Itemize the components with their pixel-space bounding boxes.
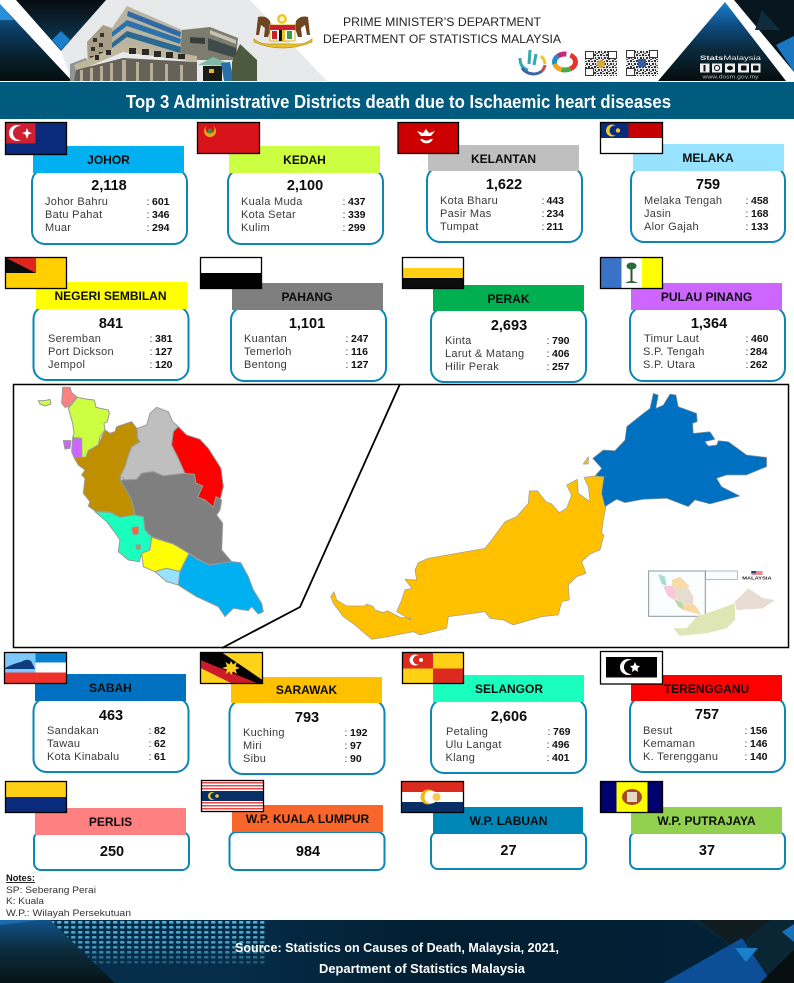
districts: Kedah: 339 — [348, 209, 366, 221]
map: Sabah and Sarawak — [331, 393, 767, 639]
flag: Johor — [6, 122, 66, 154]
header: Pulau Pinang: PULAU PINANG — [661, 290, 752, 304]
card: Selangor — [402, 652, 586, 773]
districts: Perak: : — [546, 361, 549, 373]
footer left triangles — [0, 920, 115, 983]
total: Kedah: 2,100 — [287, 178, 323, 194]
flag: Pahang — [200, 258, 262, 288]
inset map of Malaysia — [649, 571, 775, 636]
districts: Selangor: : — [546, 739, 549, 751]
districts: Perak — [445, 335, 570, 373]
total: W.P. Labuan: 27 — [500, 843, 517, 859]
districts: Sarawak: Miri — [243, 740, 262, 752]
districts: Johor: Batu Pahat — [45, 209, 102, 221]
districts: Melaka: Alor Gajah — [644, 221, 699, 233]
total: W.P. Putrajaya: 37 — [699, 843, 715, 859]
districts: Sabah: : — [148, 725, 151, 737]
districts: Selangor: : — [548, 726, 550, 738]
districts: Melaka: : — [746, 208, 748, 220]
districts: Terengganu: Kemaman — [643, 738, 695, 750]
districts: Sabah: : — [148, 751, 151, 763]
districts: Sabah: Sandakan — [47, 725, 99, 737]
districts: Terengganu — [643, 725, 768, 763]
header: Sarawak: SARAWAK — [276, 683, 337, 697]
header right StatsMalaysia panel: www.dosm.gov.my — [702, 74, 759, 80]
title bar — [0, 82, 794, 119]
total: W.P. Kuala Lumpur: 984 — [296, 844, 320, 860]
header: Negeri Sembilan: NEGERI SEMBILAN — [54, 289, 167, 303]
total: Terengganu: 757 — [695, 707, 719, 723]
districts: Perak: : — [546, 335, 549, 347]
districts: Selangor: 496 — [552, 739, 570, 751]
districts: Johor: : — [146, 196, 149, 208]
flag: Kedah — [198, 122, 260, 154]
districts: Melaka: 168 — [751, 208, 769, 220]
header: W.P. Putrajaya: W.P. PUTRAJAYA — [657, 814, 756, 828]
districts: Kedah: : — [342, 209, 345, 221]
map panel — [14, 384, 788, 648]
header left dark pattern — [0, 0, 327, 81]
districts: Sabah: 62 — [154, 738, 166, 750]
card: W.P. Putrajaya — [600, 782, 785, 869]
header banner — [0, 0, 794, 81]
districts: Johor — [45, 196, 170, 234]
districts: Pulau Pinang: : — [746, 333, 748, 345]
card: Perak — [402, 258, 586, 382]
icon: QR code website — [585, 51, 617, 76]
districts: Negeri Sembilan: 127 — [155, 346, 173, 358]
total: Negeri Sembilan: 841 — [99, 316, 123, 332]
header right StatsMalaysia panel: Stats Malaysia — [700, 55, 761, 62]
districts: Sarawak: : — [344, 740, 347, 752]
districts: Kelantan: : — [542, 208, 544, 220]
header: Melaka: MELAKA — [682, 151, 734, 165]
total: Pulau Pinang: 1,364 — [691, 316, 727, 332]
districts: Kelantan: Kota Bharu — [440, 195, 498, 207]
districts: Kedah: : — [342, 222, 345, 234]
header: Terengganu: TERENGGANU — [664, 682, 749, 696]
districts: Terengganu: : — [744, 751, 747, 763]
card: Melaka — [600, 122, 785, 242]
districts: Perak: Hilir Perak — [445, 361, 499, 373]
districts: Selangor: Petaling — [446, 726, 488, 738]
districts: Kedah: 437 — [348, 196, 366, 208]
districts: Melaka: : — [746, 221, 748, 233]
districts: Pahang: : — [346, 346, 348, 358]
districts: Selangor: 401 — [552, 752, 570, 764]
districts: Sarawak — [243, 727, 368, 765]
districts: Negeri Sembilan: 381 — [155, 333, 173, 345]
connector line — [222, 384, 400, 648]
icon: Malaysia coat of arms — [254, 14, 312, 48]
districts: Selangor — [446, 726, 571, 764]
districts: Terengganu: 140 — [750, 751, 768, 763]
districts: Negeri Sembilan: : — [150, 346, 152, 358]
districts: Sarawak: Sibu — [243, 753, 266, 765]
card: Perlis — [6, 782, 189, 870]
districts: Johor: 601 — [152, 196, 170, 208]
total: Kelantan: 1,622 — [486, 177, 522, 193]
districts: Pahang: 116 — [351, 346, 368, 358]
flag: Sabah — [4, 652, 66, 684]
districts: Perak: : — [546, 348, 549, 360]
header: Johor — [33, 146, 184, 173]
inset map of Malaysia: MALAYSIA — [742, 576, 773, 581]
header organisation text — [323, 15, 562, 46]
districts: Sarawak: : — [344, 753, 347, 765]
total: Perlis: 250 — [100, 844, 124, 860]
districts: Terengganu: K. Terengganu — [643, 751, 718, 763]
districts: Johor: Johor Bahru — [45, 196, 108, 208]
districts: Johor: : — [146, 222, 149, 234]
header: Sabah: SABAH — [89, 681, 132, 695]
districts: Pahang: : — [346, 359, 348, 371]
flag: Pulau Pinang — [600, 258, 662, 288]
districts: Kelantan — [440, 195, 564, 233]
districts: Melaka: Melaka Tengah — [644, 195, 722, 207]
header: Perlis: PERLIS — [89, 815, 132, 829]
districts: Pulau Pinang: S.P. Utara — [643, 359, 696, 371]
flag: Perlis — [6, 782, 66, 812]
districts: Kelantan: Pasir Mas — [440, 208, 492, 220]
districts: Kedah — [241, 196, 366, 234]
building photo — [70, 6, 257, 81]
header: Terengganu — [631, 675, 782, 701]
districts: Kedah: : — [342, 196, 345, 208]
card: Terengganu — [600, 652, 785, 772]
districts: Selangor: 769 — [553, 726, 571, 738]
header: W.P. Labuan: W.P. LABUAN — [470, 814, 547, 828]
districts: Kedah: Kuala Muda — [241, 196, 303, 208]
districts: Johor: 346 — [152, 209, 170, 221]
districts: Pahang — [244, 333, 369, 371]
districts: Terengganu: : — [744, 738, 747, 750]
total: Perak: 2,693 — [491, 318, 527, 334]
districts: Kelantan: : — [542, 195, 544, 207]
flag: W.P. Putrajaya — [600, 782, 662, 812]
districts: Sabah: 82 — [154, 725, 166, 737]
districts: Kelantan: : — [542, 221, 544, 233]
districts: Selangor: Ulu Langat — [446, 739, 502, 751]
total: Johor: 2,118 — [91, 178, 127, 194]
districts: Melaka: Jasin — [644, 208, 671, 220]
header organisation text: DEPARTMENT OF STATISTICS MALAYSIA — [323, 32, 562, 46]
flag: W.P. Kuala Lumpur — [202, 780, 264, 812]
card: Sarawak — [200, 652, 384, 774]
districts: Sabah: Tawau — [47, 738, 80, 750]
card: Sabah — [4, 652, 188, 772]
districts: Pulau Pinang: 460 — [751, 333, 769, 345]
districts: Sabah — [47, 725, 166, 763]
flag: Negeri Sembilan — [6, 258, 66, 288]
districts: Kelantan: 443 — [546, 195, 564, 207]
districts: Sarawak: : — [344, 727, 347, 739]
total: Selangor: 2,606 — [491, 709, 527, 725]
districts: Pulau Pinang: 262 — [750, 359, 768, 371]
districts: Pulau Pinang: Timur Laut — [644, 333, 699, 345]
map: Peninsular Malaysia — [38, 387, 263, 617]
header: Selangor — [433, 675, 584, 702]
districts: Negeri Sembilan — [48, 333, 173, 371]
card: Kedah — [198, 122, 383, 244]
footer band — [0, 920, 794, 983]
header: W.P. Putrajaya — [631, 807, 782, 834]
header: Sarawak — [231, 677, 382, 703]
districts: Pahang: Kuantan — [244, 333, 287, 345]
header: Sabah — [35, 674, 186, 701]
districts: Negeri Sembilan: Jempol — [48, 359, 85, 371]
districts: Kedah: 299 — [348, 222, 366, 234]
districts: Pahang: Bentong — [244, 359, 287, 371]
districts: Terengganu: Besut — [643, 725, 673, 737]
districts: Pahang: 127 — [351, 359, 369, 371]
districts: Pahang: 247 — [351, 333, 369, 345]
flag: Melaka — [600, 122, 662, 154]
districts: Pulau Pinang: : — [746, 359, 748, 371]
icon: QR code facebook — [626, 50, 658, 76]
header: Perak — [433, 285, 584, 311]
districts: Kelantan: 234 — [546, 208, 564, 220]
districts: Melaka: 133 — [751, 221, 769, 233]
districts: Negeri Sembilan: : — [150, 359, 152, 371]
districts: Sabah: : — [148, 738, 151, 750]
districts: Melaka — [644, 195, 769, 233]
header: W.P. Kuala Lumpur: W.P. KUALA LUMPUR — [246, 812, 369, 826]
total: Sabah: 463 — [99, 708, 123, 724]
card: Johor — [6, 122, 187, 244]
header: Pahang — [232, 283, 383, 310]
flag: Sarawak — [200, 652, 262, 684]
districts: Negeri Sembilan: : — [150, 333, 152, 345]
icon: statistics logo — [520, 50, 545, 74]
header: Pahang: PAHANG — [281, 290, 333, 304]
footer dot pattern — [45, 920, 265, 965]
districts: Negeri Sembilan: Port Dickson — [48, 346, 114, 358]
districts: Pulau Pinang: S.P. Tengah — [643, 346, 705, 358]
districts: Negeri Sembilan: 120 — [155, 359, 173, 371]
flag: W.P. Labuan — [402, 782, 464, 812]
header: Perak: PERAK — [487, 292, 530, 306]
header: Kelantan — [428, 145, 579, 171]
header: Selangor: SELANGOR — [475, 682, 543, 696]
source text — [235, 940, 559, 976]
total: Melaka: 759 — [696, 177, 720, 193]
districts: Perak: 406 — [552, 348, 570, 360]
districts: Sarawak: Kuching — [243, 727, 285, 739]
districts: Johor: Muar — [45, 222, 71, 234]
header: W.P. Labuan — [433, 807, 583, 834]
districts: Perak: 790 — [552, 335, 570, 347]
notes: SP: Seberang Perai — [6, 885, 96, 896]
header: Negeri Sembilan — [36, 282, 187, 309]
districts: Selangor: Klang — [446, 752, 475, 764]
card: W.P. Kuala Lumpur — [202, 780, 384, 870]
header: Pulau Pinang — [631, 283, 782, 310]
districts: Terengganu: 156 — [750, 725, 768, 737]
flag: Kelantan — [398, 122, 458, 154]
districts: Terengganu: : — [744, 725, 747, 737]
header: Perlis — [35, 808, 186, 835]
card: Pulau Pinang — [600, 258, 785, 381]
source text: Department of Statistics Malaysia — [319, 961, 526, 976]
header: Kedah: KEDAH — [283, 153, 326, 167]
header: Johor: JOHOR — [87, 153, 130, 167]
title bar: Top 3 Administrative Districts death due to Ischaemic heart diseases — [126, 92, 671, 112]
card: W.P. Labuan — [402, 782, 586, 869]
districts: Sarawak: 97 — [350, 740, 362, 752]
districts: Perak: Kinta — [445, 335, 472, 347]
districts: Pulau Pinang: : — [746, 346, 748, 358]
districts: Johor: 294 — [152, 222, 170, 234]
districts: Melaka: 458 — [751, 195, 769, 207]
districts: Sarawak: 90 — [350, 753, 362, 765]
card: Pahang — [200, 258, 386, 381]
card: Negeri Sembilan — [6, 258, 188, 380]
header: Kelantan: KELANTAN — [471, 152, 536, 166]
districts: Sabah: Kota Kinabalu — [47, 751, 119, 763]
total: Sarawak: 793 — [295, 710, 319, 726]
districts: Sarawak: 192 — [350, 727, 368, 739]
districts: Pahang: Temerloh — [244, 346, 292, 358]
flag: Terengganu — [600, 652, 662, 684]
notes: K: Kuala — [6, 896, 45, 907]
districts: Kedah: Kota Setar — [241, 209, 296, 221]
footer right triangles — [663, 920, 794, 983]
notes: W.P.: Wilayah Persekutuan — [6, 908, 131, 919]
districts: Pahang: : — [346, 333, 348, 345]
districts: Kelantan: Tumpat — [440, 221, 479, 233]
flag: Selangor — [402, 652, 464, 684]
source text: Source: Statistics on Causes of Death, Malaysia, 2021, — [235, 940, 559, 955]
districts: Selangor: : — [546, 752, 549, 764]
districts: Negeri Sembilan: Seremban — [48, 333, 101, 345]
header organisation text: PRIME MINISTER’S DEPARTMENT — [343, 15, 541, 29]
header right StatsMalaysia panel — [658, 0, 794, 81]
notes: Notes: — [6, 873, 35, 883]
header: Melaka — [633, 144, 784, 171]
districts: Kelantan: 211 — [546, 221, 564, 233]
districts: Pulau Pinang — [643, 333, 769, 371]
header: W.P. Kuala Lumpur — [232, 805, 383, 832]
districts: Johor: : — [146, 209, 149, 221]
card: Kelantan — [398, 122, 582, 242]
districts: Pulau Pinang: 284 — [750, 346, 768, 358]
flag: Perak — [402, 258, 464, 288]
districts: Perak: 257 — [552, 361, 570, 373]
districts: Sabah: 61 — [154, 751, 166, 763]
districts: Kedah: Kulim — [241, 222, 270, 234]
notes — [6, 873, 131, 919]
districts: Perak: Larut & Matang — [445, 348, 524, 360]
districts: Terengganu: 146 — [750, 738, 768, 750]
header: Kedah — [229, 146, 380, 173]
total: Pahang: 1,101 — [289, 316, 325, 332]
icon: SDG wheel — [554, 54, 576, 70]
districts: Melaka: : — [746, 195, 748, 207]
